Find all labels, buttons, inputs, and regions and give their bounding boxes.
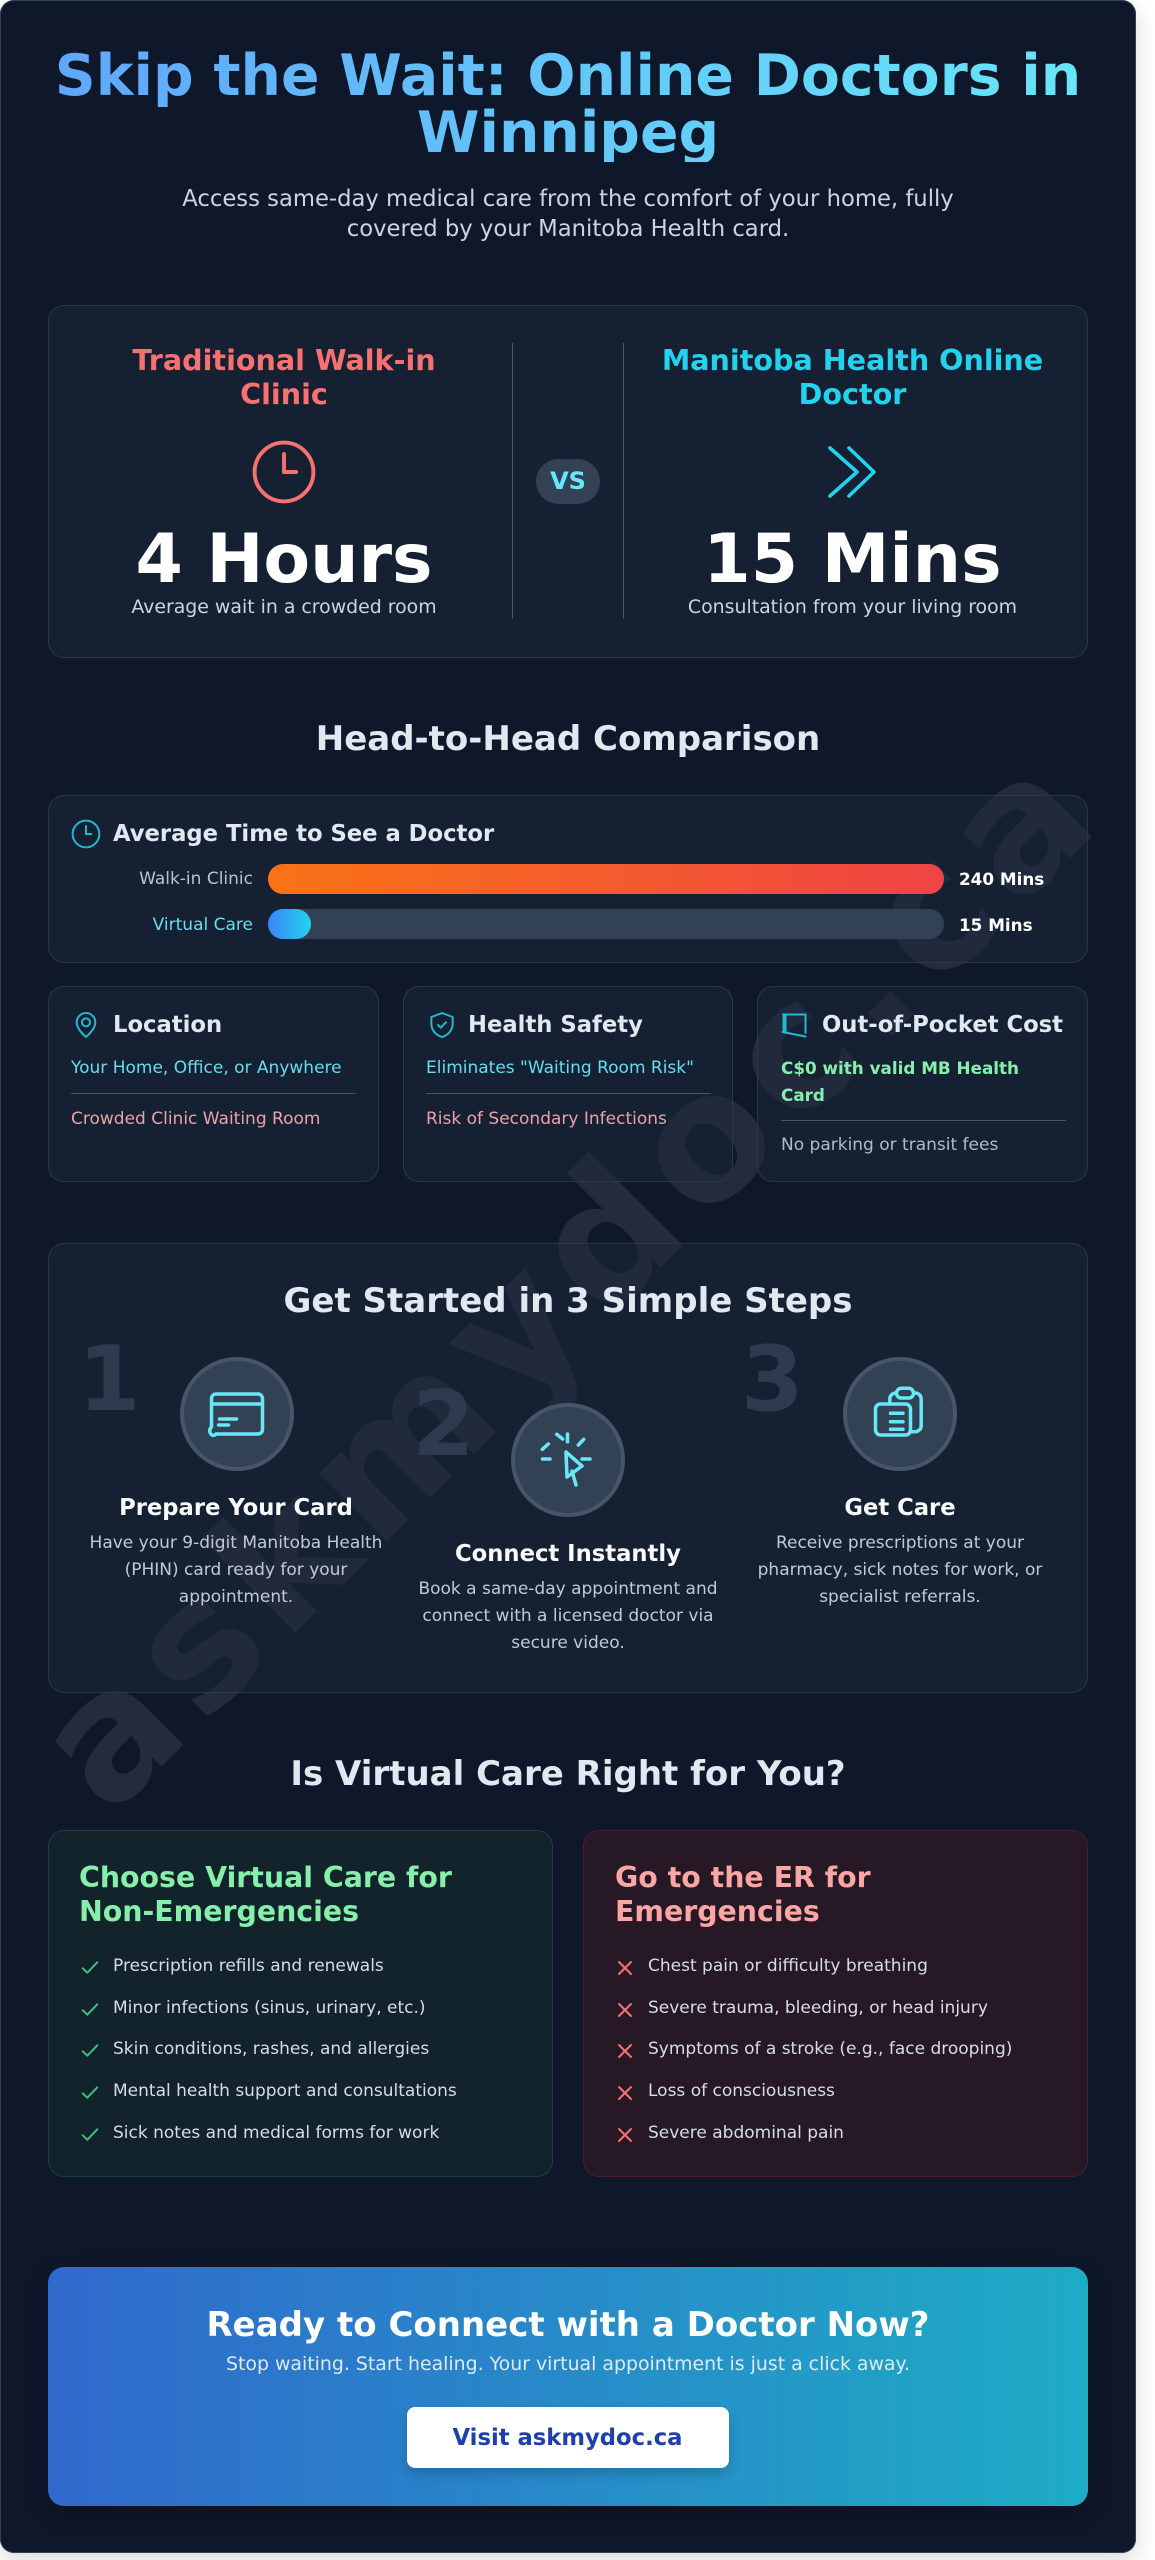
- step description: Have your 9-digit Manitoba Health: [90, 1532, 382, 1552]
- step title: Prepare Your Card: [119, 1495, 353, 1521]
- subtitle: covered by your Manitoba Health card.: [347, 216, 789, 242]
- heading: get started: Get Started in 3 Simple Steps: [283, 1281, 853, 1321]
- virtual value: Your Home, Office, or Anywhere: [71, 1058, 342, 1078]
- title: [28, 48, 1108, 162]
- heading: health safety: Health Safety: [468, 1012, 643, 1038]
- divider left: [512, 343, 513, 619]
- icon: shield check: [430, 1012, 454, 1038]
- icon: cursor click: [511, 1403, 625, 1517]
- heading: Non-Emergencies: [79, 1895, 359, 1928]
- step description: [90, 1532, 382, 1606]
- clinic value: Crowded Clinic Waiting Room: [71, 1108, 320, 1128]
- icon: double chevron: [828, 446, 876, 498]
- step 2: [412, 1372, 718, 1652]
- label: walk-in clinic: Walk-in Clinic: [139, 869, 253, 889]
- badge: vs: [536, 459, 600, 504]
- bar: virtual care: [268, 909, 944, 939]
- step description: pharmacy, sick notes for work, or: [758, 1560, 1042, 1580]
- panel: get started steps: [48, 1243, 1088, 1693]
- virtual value: C$0 with valid MB Health: [781, 1058, 1019, 1078]
- list item: Loss of consciousness: [648, 2081, 835, 2101]
- heading: traditional walk-in clinic: Traditional Walk-in: [132, 343, 436, 377]
- heading: location: Location: [113, 1012, 222, 1038]
- list item: Mental health support and consultations: [113, 2081, 457, 2101]
- bar: walk-in clinic: [268, 864, 944, 894]
- step 3: [741, 1327, 1042, 1606]
- step title: Connect Instantly: [455, 1540, 681, 1566]
- panel: location: [48, 986, 379, 1182]
- cta heading: Ready to Connect with a Doctor Now?: [206, 2305, 930, 2345]
- heading: [615, 1861, 871, 1928]
- virtual value: Card: [781, 1084, 825, 1104]
- cta text: Stop waiting. Start healing. Your virtual appointment is just a click away.: [226, 2353, 910, 2375]
- step description: Receive prescriptions at your: [776, 1532, 1024, 1552]
- virtual value: Eliminates "Waiting Room Risk": [426, 1058, 694, 1078]
- cta button: Visit askmydoc.ca: [453, 2425, 682, 2451]
- step description: appointment.: [179, 1586, 293, 1606]
- heading: head-to-head comparison: Head-to-Head Comparison: [316, 718, 820, 758]
- step description: specialist referrals.: [819, 1586, 981, 1606]
- heading: online doctor: Manitoba Health Online: [662, 343, 1043, 377]
- list item: Chest pain or difficulty breathing: [648, 1956, 928, 1976]
- heading: online doctor: [662, 343, 1043, 411]
- step number 3: 3: [741, 1327, 804, 1432]
- heading: traditional walk-in clinic: Clinic: [240, 377, 328, 411]
- icon: clipboard: [842, 1357, 956, 1471]
- heading: Go to the ER for: [615, 1861, 871, 1894]
- step number 1: 1: [78, 1327, 141, 1432]
- title: Skip the Wait: Online Doctors in: [55, 43, 1081, 109]
- list item: Skin conditions, rashes, and allergies: [113, 2039, 429, 2059]
- icon: banknote: [782, 1014, 806, 1038]
- caption: average wait: Average wait in a crowded room: [131, 596, 437, 618]
- label: virtual care: Virtual Care: [153, 914, 253, 934]
- icon: clock: [72, 820, 100, 848]
- bar chart heading: Average Time to See a Doctor: [113, 821, 494, 847]
- step title: Get Care: [844, 1495, 956, 1521]
- value: 240 mins: 240 Mins: [959, 869, 1044, 889]
- list item: Minor infections (sinus, urinary, etc.): [113, 1998, 426, 2018]
- list item: Sick notes and medical forms for work: [113, 2123, 439, 2143]
- panel: go to the ER: [583, 1830, 1088, 2177]
- panel: call to action: [48, 2267, 1088, 2506]
- panel: average time bar chart: [48, 795, 1088, 963]
- list item: Symptoms of a stroke (e.g., face drooping): [648, 2039, 1012, 2059]
- caption: consultation: Consultation from your living room: [688, 596, 1017, 618]
- list item: Severe trauma, bleeding, or head injury: [648, 1998, 988, 2018]
- heading: Emergencies: [615, 1895, 820, 1928]
- title: Winnipeg: [417, 100, 719, 166]
- panel: choose virtual care: [48, 1830, 553, 2177]
- badge: vs: VS: [550, 467, 586, 495]
- value: 15 mins: 15 Mins: [959, 914, 1033, 934]
- divider right: [623, 343, 624, 619]
- heading: is virtual care right for you: Is Virtual Care Right for You?: [290, 1754, 846, 1794]
- step description: connect with a licensed doctor via: [422, 1606, 714, 1626]
- heading: online doctor: Doctor: [799, 377, 906, 411]
- step description: [758, 1532, 1042, 1606]
- step description: (PHIN) card ready for your: [125, 1560, 347, 1580]
- heading: [79, 1861, 452, 1928]
- list item: Severe abdominal pain: [648, 2123, 844, 2143]
- heading: traditional walk-in clinic: [132, 343, 436, 411]
- list item: Prescription refills and renewals: [113, 1956, 384, 1976]
- step description: [418, 1578, 718, 1652]
- panel: out-of-pocket cost: [757, 986, 1088, 1182]
- watermark: askmydoc.ca: askmydoc.ca: [0, 704, 1136, 1848]
- clinic value: No parking or transit fees: [781, 1135, 998, 1155]
- icon: clock: [252, 440, 316, 504]
- virtual value: [781, 1058, 1019, 1104]
- step number 2: 2: [412, 1372, 475, 1476]
- step description: secure video.: [511, 1632, 625, 1652]
- step 1: [78, 1327, 382, 1606]
- cta button: [406, 2407, 728, 2468]
- icon: health card: [180, 1357, 294, 1471]
- subtitle: Access same-day medical care from the comfort of your home, fully: [182, 186, 954, 212]
- heading: out-of-pocket cost: Out-of-Pocket Cost: [822, 1012, 1063, 1038]
- panel: health safety: [403, 986, 733, 1182]
- bar fill: [268, 909, 311, 939]
- step description: Book a same-day appointment and: [418, 1578, 718, 1598]
- stat: 4 hours: 4 Hours: [135, 520, 433, 599]
- panel: wait time comparison: [48, 305, 1088, 658]
- clinic value: Risk of Secondary Infections: [426, 1108, 667, 1128]
- icon: map pin: [76, 1012, 96, 1038]
- subtitle: [182, 186, 954, 242]
- heading: Choose Virtual Care for: [79, 1861, 452, 1894]
- stat: 15 mins: 15 Mins: [703, 520, 1002, 599]
